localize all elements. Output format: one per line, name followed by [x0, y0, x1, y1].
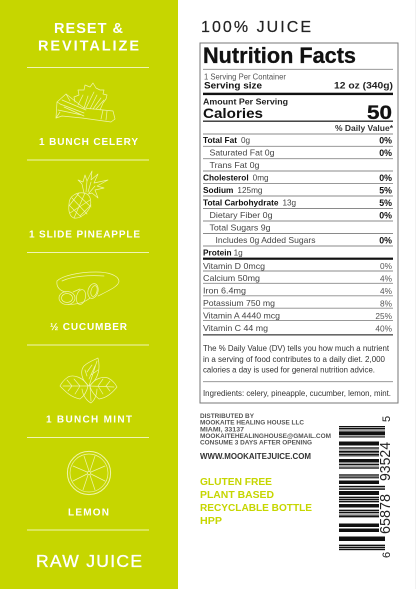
vitamin and mineral rows: Vitamin A 4440 mcg — [203, 312, 280, 320]
icon: pineapple — [69, 171, 108, 218]
label: half cucumber: ½ CUCUMBER — [50, 322, 128, 333]
calories: Amount Per Serving — [203, 98, 288, 106]
vitamin and mineral rows: 8% — [380, 298, 393, 308]
vitamin and mineral rows: Potassium 750 mg — [203, 299, 275, 308]
label: 1 bunch mint: 1 BUNCH MINT — [46, 415, 132, 426]
barcode: 5 — [381, 416, 393, 422]
nutrient rows: Total Fat 0g — [203, 135, 251, 145]
daily value footnote — [203, 344, 390, 374]
label: raw juice: RAW JUICE — [36, 551, 142, 571]
nutrient rows: Trans Fat 0g — [210, 161, 260, 170]
serving information: 12 oz (340g) — [334, 80, 393, 90]
heading: reset and revitalize — [38, 21, 139, 54]
label: lemon: LEMON — [68, 508, 109, 519]
nutrient rows: Total Sugars 9g — [210, 224, 271, 232]
panel: nutrition facts label — [200, 43, 398, 403]
distributor details: DISTRIBUTED BY — [200, 413, 255, 420]
vitamin and mineral rows: 0% — [380, 261, 393, 271]
daily value footnote: in a serving of food contributes to a daily diet. 2,000 — [203, 355, 386, 364]
nutrient rows: Cholesterol 0mg — [203, 172, 269, 182]
label: 1 slide pineapple: 1 SLIDE PINEAPPLE — [29, 230, 140, 240]
calories — [203, 98, 392, 124]
heading: reset and revitalize: RESET & — [54, 21, 124, 37]
vitamin and mineral rows: Iron 6.4mg — [203, 286, 246, 296]
nutrient rows: 5% — [379, 198, 392, 208]
vitamin and mineral rows: 4% — [380, 286, 393, 296]
nutrient rows: 0% — [379, 210, 392, 220]
daily value footnote: The % Daily Value (DV) tells you how much a nutrient — [203, 344, 390, 353]
barcode: 93524 — [378, 442, 394, 481]
nutrient rows — [203, 135, 392, 258]
vitamin and mineral rows: Vitamin D 0mcg — [203, 262, 265, 271]
vitamin and mineral rows: 4% — [380, 274, 393, 284]
title: nutrition facts: Nutrition Facts — [203, 43, 356, 68]
icon: mint — [60, 358, 117, 403]
barcode: 65878 — [378, 494, 394, 534]
serving information: 1 Serving Per Container — [204, 72, 286, 82]
distributor details: CONSUME 3 DAYS AFTER OPENING — [200, 440, 312, 446]
distributor details: MOOKAITE HEALING HOUSE LLC — [200, 420, 304, 427]
daily value footnote: calories a day is used for general nutrition advice. — [203, 366, 375, 374]
nutrient rows: Protein1g — [203, 248, 243, 258]
ingredients list: Ingredients: celery, pineapple, cucumber, lemon, mint. — [203, 389, 391, 398]
icon: cucumber — [57, 272, 119, 305]
nutrient rows: Includes 0g Added Sugars — [216, 236, 316, 245]
product claims — [200, 476, 312, 527]
website: WWW.MOOKAITEJUICE.COM — [200, 452, 311, 461]
product claims: HPP — [200, 515, 222, 527]
vitamin and mineral rows — [203, 261, 393, 334]
nutrient rows: Sodium 125mg — [203, 185, 263, 195]
nutrient rows: 0% — [379, 236, 392, 246]
product claims: PLANT BASED — [200, 489, 274, 501]
nutrient rows: 5% — [379, 186, 392, 196]
serving information — [204, 72, 393, 90]
product claims: RECYCLABLE BOTTLE — [200, 502, 312, 514]
vitamin and mineral rows: Calcium 50mg — [203, 274, 260, 283]
daily value header: % Daily Value* — [335, 124, 394, 133]
serving information: Serving size — [204, 80, 262, 90]
nutrient rows: Saturated Fat 0g — [210, 149, 275, 158]
vitamin and mineral rows: 40% — [375, 324, 393, 334]
icon: celery — [56, 83, 115, 122]
label: 1 bunch celery: 1 BUNCH CELERY — [39, 137, 138, 148]
icon: lemon — [67, 451, 111, 495]
heading: reset and revitalize: REVITALIZE — [38, 38, 139, 54]
distributor details — [200, 413, 331, 446]
product claims: GLUTEN FREE — [200, 476, 272, 488]
distributor details: MOOKAITEHEALINGHOUSE@GMAIL.COM — [200, 433, 331, 440]
nutrient rows: Dietary Fiber 0g — [210, 211, 273, 220]
nutrient rows: 0% — [379, 148, 392, 158]
nutrient rows: 0% — [379, 136, 392, 146]
panel: ingredients sidebar — [0, 0, 178, 589]
barcode — [339, 416, 394, 558]
vitamin and mineral rows: Vitamin C 44 mg — [203, 324, 268, 333]
calories: Calories — [203, 105, 263, 121]
nutrient rows: Total Carbohydrate 13g — [203, 198, 297, 208]
vitamin and mineral rows: 25% — [375, 311, 393, 321]
nutrient rows: 0% — [379, 173, 392, 183]
heading: 100% juice: 100% JUICE — [201, 19, 311, 36]
barcode: 6 — [381, 552, 393, 558]
distributor details: MIAMI, 33137 — [200, 426, 244, 433]
calories: 50 — [367, 102, 392, 124]
